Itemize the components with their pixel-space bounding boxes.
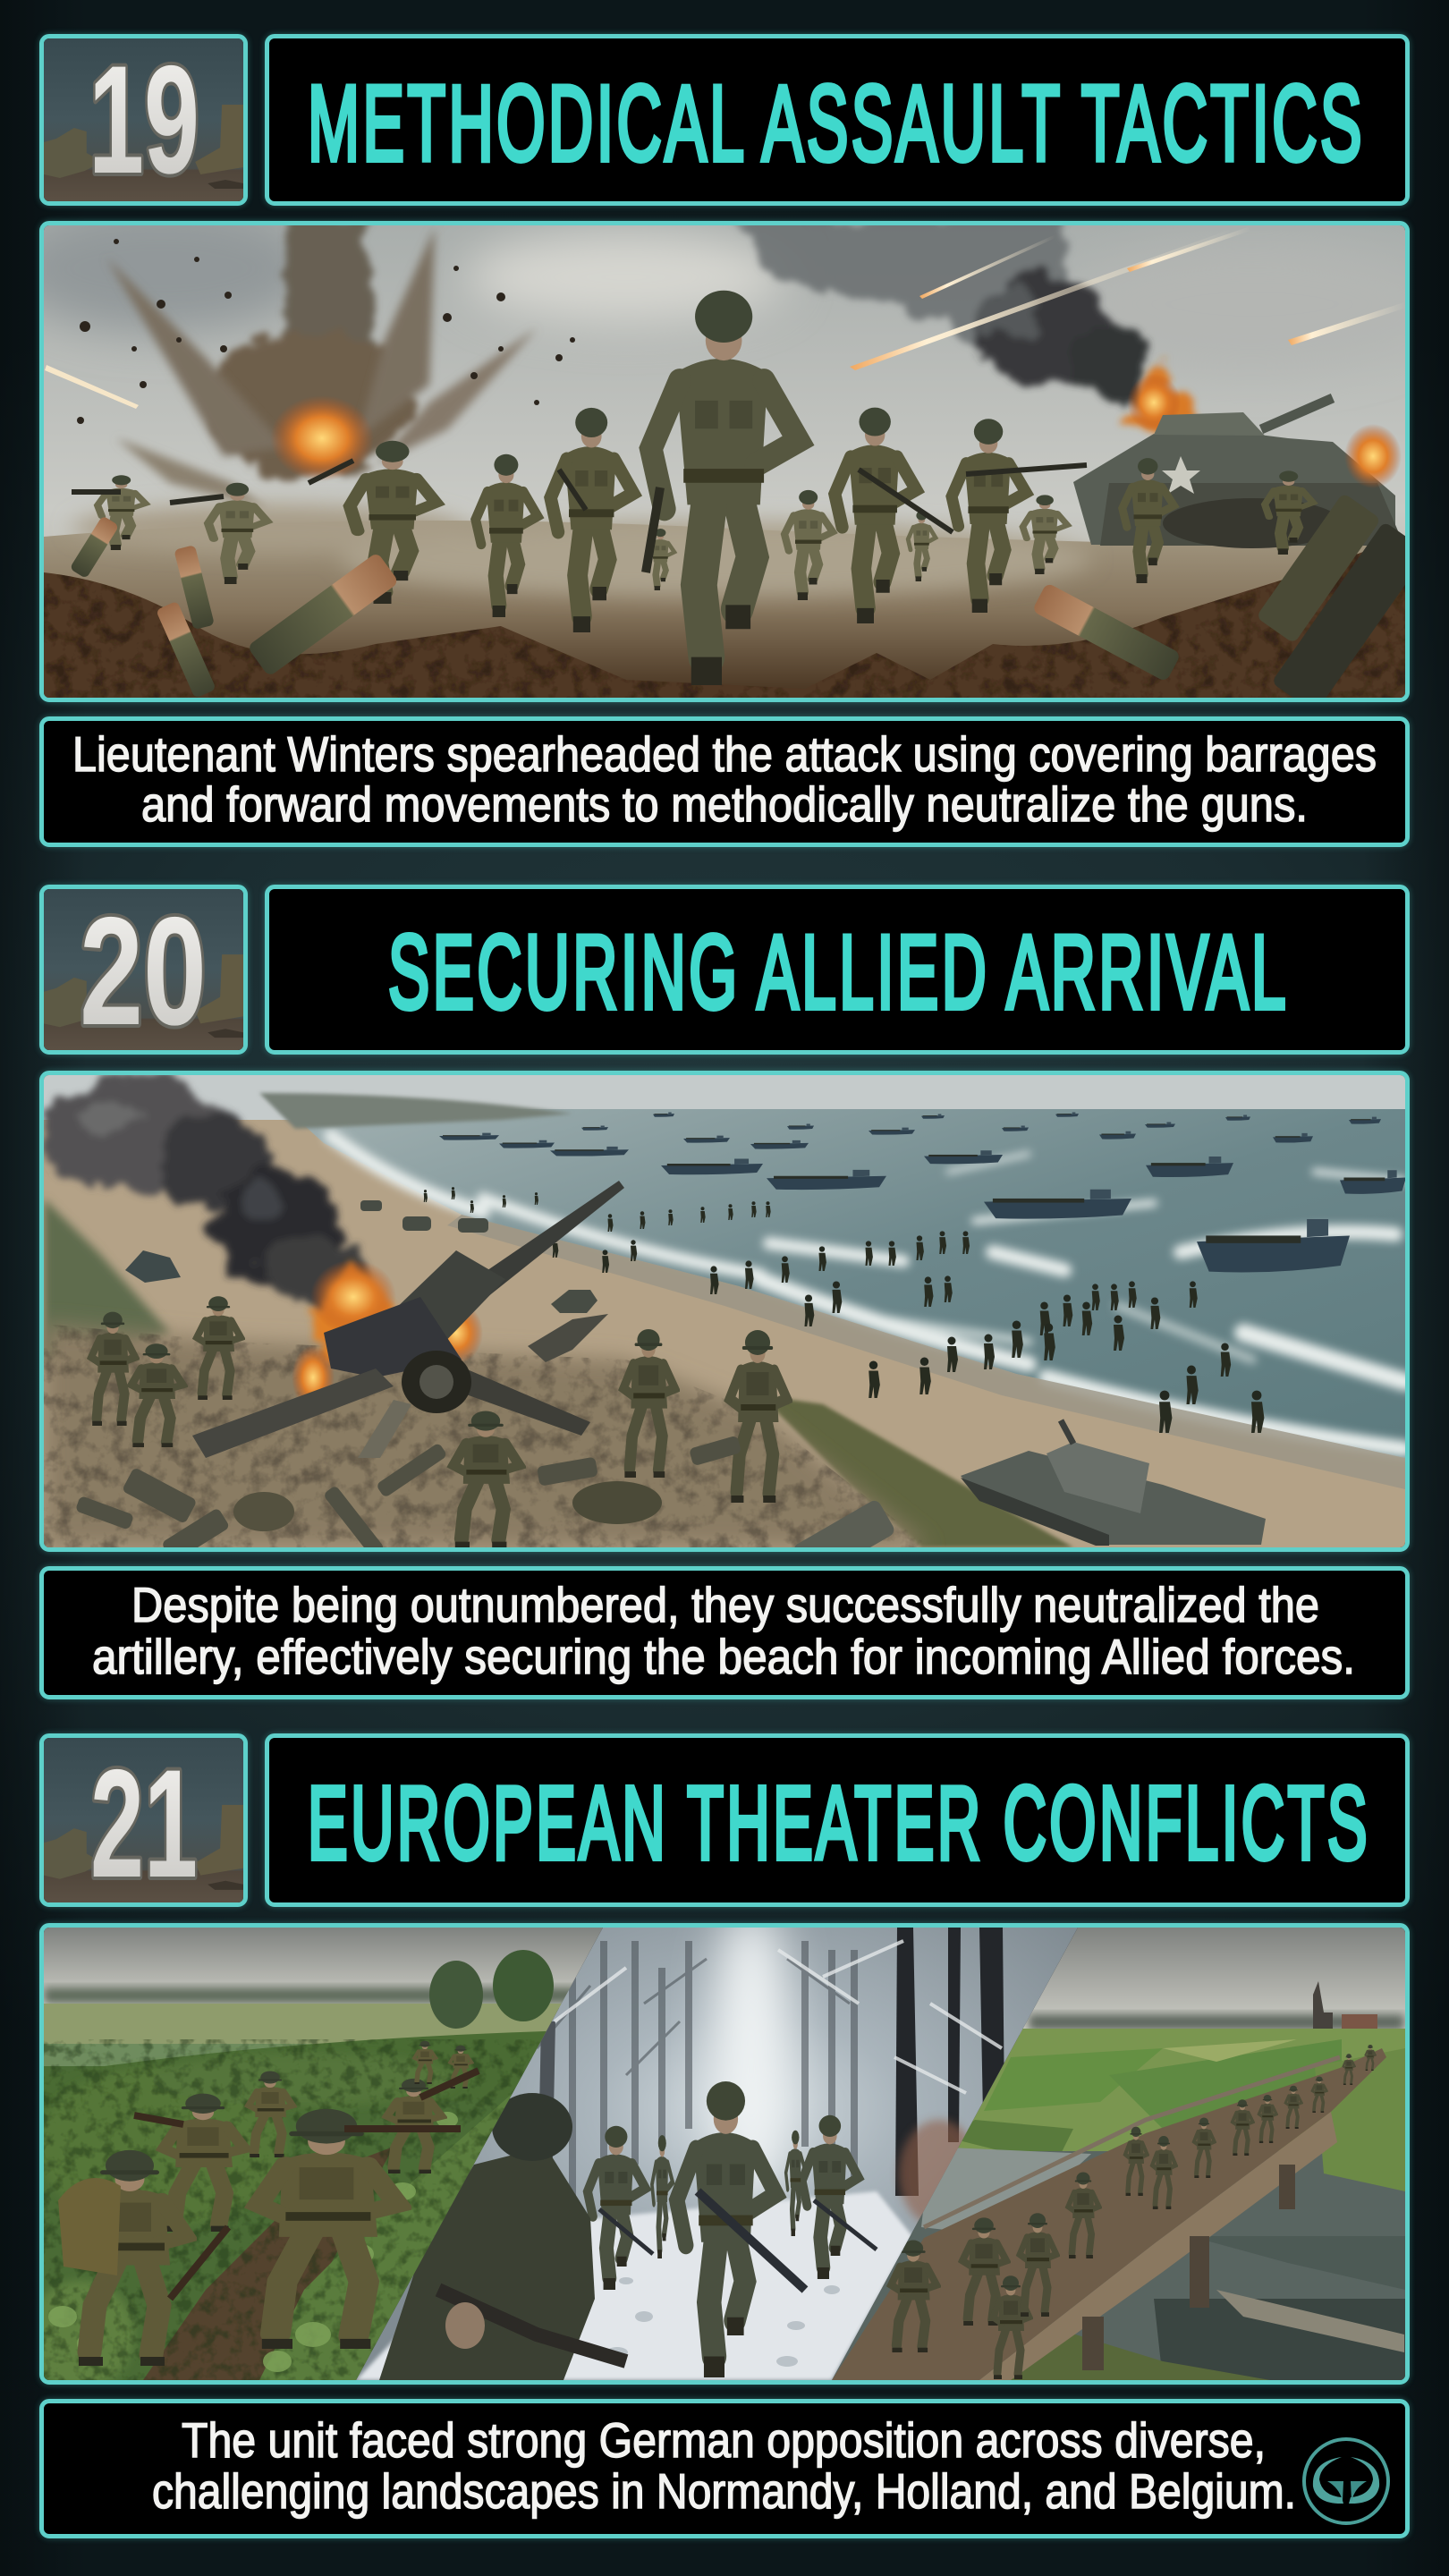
title: securing allied arrival [265, 885, 1410, 1055]
title: european theater conflicts [265, 1733, 1410, 1907]
winter soldiers [588, 2081, 859, 2377]
artillery gun [192, 1181, 624, 1458]
dark smoke, right [739, 215, 1149, 402]
middle scene: snowy forest [356, 1905, 1080, 2380]
panel: section 21 [36, 1730, 1413, 2542]
caption 19 [39, 716, 1410, 847]
grass strip [760, 1395, 1073, 1547]
fire [292, 1259, 483, 1410]
small vehicles [125, 1200, 608, 1362]
foreground soldiers [350, 408, 1313, 632]
caption 21 [39, 2399, 1410, 2538]
illustration: three landscapes triptych [39, 1923, 1410, 2385]
explosion plume [77, 215, 575, 510]
shell casings [75, 1436, 896, 1581]
boats [439, 1112, 1406, 1272]
number tile 21 [39, 1733, 248, 1907]
lead soldier [646, 291, 799, 685]
illustration: soldiers assaulting with explosion and tank [39, 221, 1410, 702]
caption 20 [39, 1566, 1410, 1699]
ground [44, 521, 1405, 698]
tracers [45, 227, 1406, 409]
background soldiers [97, 475, 1068, 600]
foreground soldier [379, 2093, 626, 2380]
illustration: beach landing with destroyed artillery [39, 1071, 1410, 1552]
bridge deck [832, 2048, 1386, 2380]
rifles [72, 461, 1087, 532]
title: methodical assault tactics [265, 34, 1410, 206]
foreground sand [44, 1324, 930, 1547]
shells [70, 493, 1428, 713]
burning tank [1073, 358, 1404, 548]
earth mounds [44, 552, 1405, 698]
caption 21: The unit faced strong German opposition across diverse, [182, 2412, 1266, 2468]
logo emblem [1304, 2439, 1388, 2523]
right scene: bridge and farmland [832, 1928, 1406, 2380]
foreground tank [961, 1420, 1266, 1546]
headland [259, 1093, 572, 1129]
muddy ground [143, 2147, 394, 2380]
soldiers wading and running [424, 1187, 1264, 1433]
soldiers on bridge [891, 2045, 1376, 2379]
smoke [40, 1073, 367, 1306]
panel: section 20 [36, 882, 1413, 1703]
panel: section 19 [36, 30, 1413, 850]
hedgerow soldiers [76, 2041, 472, 2366]
wet sand [447, 1215, 1405, 1489]
left scene: hedgerow [27, 1928, 616, 2388]
ground soldiers [91, 1296, 787, 1547]
sea and waves [286, 1109, 1405, 1458]
church [1313, 1981, 1333, 2030]
